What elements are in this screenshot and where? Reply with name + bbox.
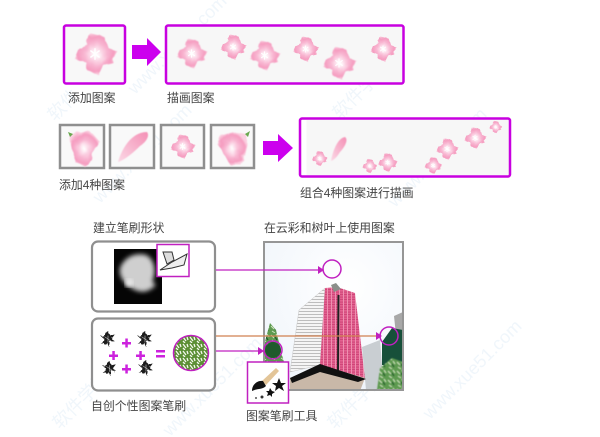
panel: four patterns xyxy=(60,125,254,168)
connector: brush shape to sky xyxy=(216,266,324,274)
watermark: www.xue51.com xyxy=(88,100,196,208)
panel: brush shape xyxy=(92,242,215,312)
icon: pattern brush tool xyxy=(248,362,288,403)
label: add pattern: 添加图案 xyxy=(68,91,116,105)
watermark: www.xue51.com xyxy=(383,104,491,212)
target circles xyxy=(264,260,398,359)
pink tower xyxy=(320,287,365,378)
icon: brush tip xyxy=(157,244,189,276)
photo: building xyxy=(264,242,403,391)
brush leaves xyxy=(100,331,154,376)
podium xyxy=(290,365,365,391)
label: add four patterns: 添加4种图案 xyxy=(59,178,125,192)
icon: blossom right xyxy=(218,131,250,165)
icon: petal xyxy=(118,132,148,162)
panel: drawn pattern strip xyxy=(166,26,404,84)
icon: pink flower source xyxy=(74,33,117,75)
watermark: 软件学堂 xyxy=(49,368,114,433)
label: use pattern on clouds and leaves: 在云彩和树叶上使用图案 xyxy=(264,221,395,235)
icon: green pattern circle xyxy=(174,336,208,370)
watermark: 软件 xyxy=(44,85,83,125)
flowers in strip xyxy=(177,34,396,79)
right trees xyxy=(382,328,403,365)
panel: single source pattern xyxy=(64,26,125,84)
arrow: add to draw xyxy=(132,38,161,66)
icon: blossom left xyxy=(68,132,100,166)
white tower face xyxy=(290,288,325,372)
connector: pattern to left tree xyxy=(216,347,264,355)
connector: pattern to right tree xyxy=(216,332,382,340)
grey building xyxy=(362,340,384,390)
plus signs and equals xyxy=(109,338,165,374)
watermark: www.xue51.com xyxy=(418,316,526,424)
left tree xyxy=(264,323,284,362)
panel: combined strip xyxy=(300,118,510,176)
flowers in combined strip xyxy=(312,121,502,174)
black brush blob square xyxy=(114,249,162,304)
watermark: 软件学堂 xyxy=(324,368,389,433)
label: build brush shape: 建立笔刷形状 xyxy=(93,221,164,235)
label: draw pattern: 描画图案 xyxy=(167,91,215,105)
label: combine four patterns: 组合4种图案进行描画 xyxy=(300,186,414,200)
watermark: 软件学堂 xyxy=(329,58,394,123)
label: pattern brush tool: 图案笔刷工具 xyxy=(246,409,317,423)
panel: custom pattern brush xyxy=(92,318,215,390)
icon: small flower xyxy=(170,134,195,159)
label: custom pattern brush: 自创个性图案笔刷 xyxy=(91,399,186,413)
watermark: www.xue51.com xyxy=(158,333,266,437)
arrow: combine xyxy=(263,134,293,162)
